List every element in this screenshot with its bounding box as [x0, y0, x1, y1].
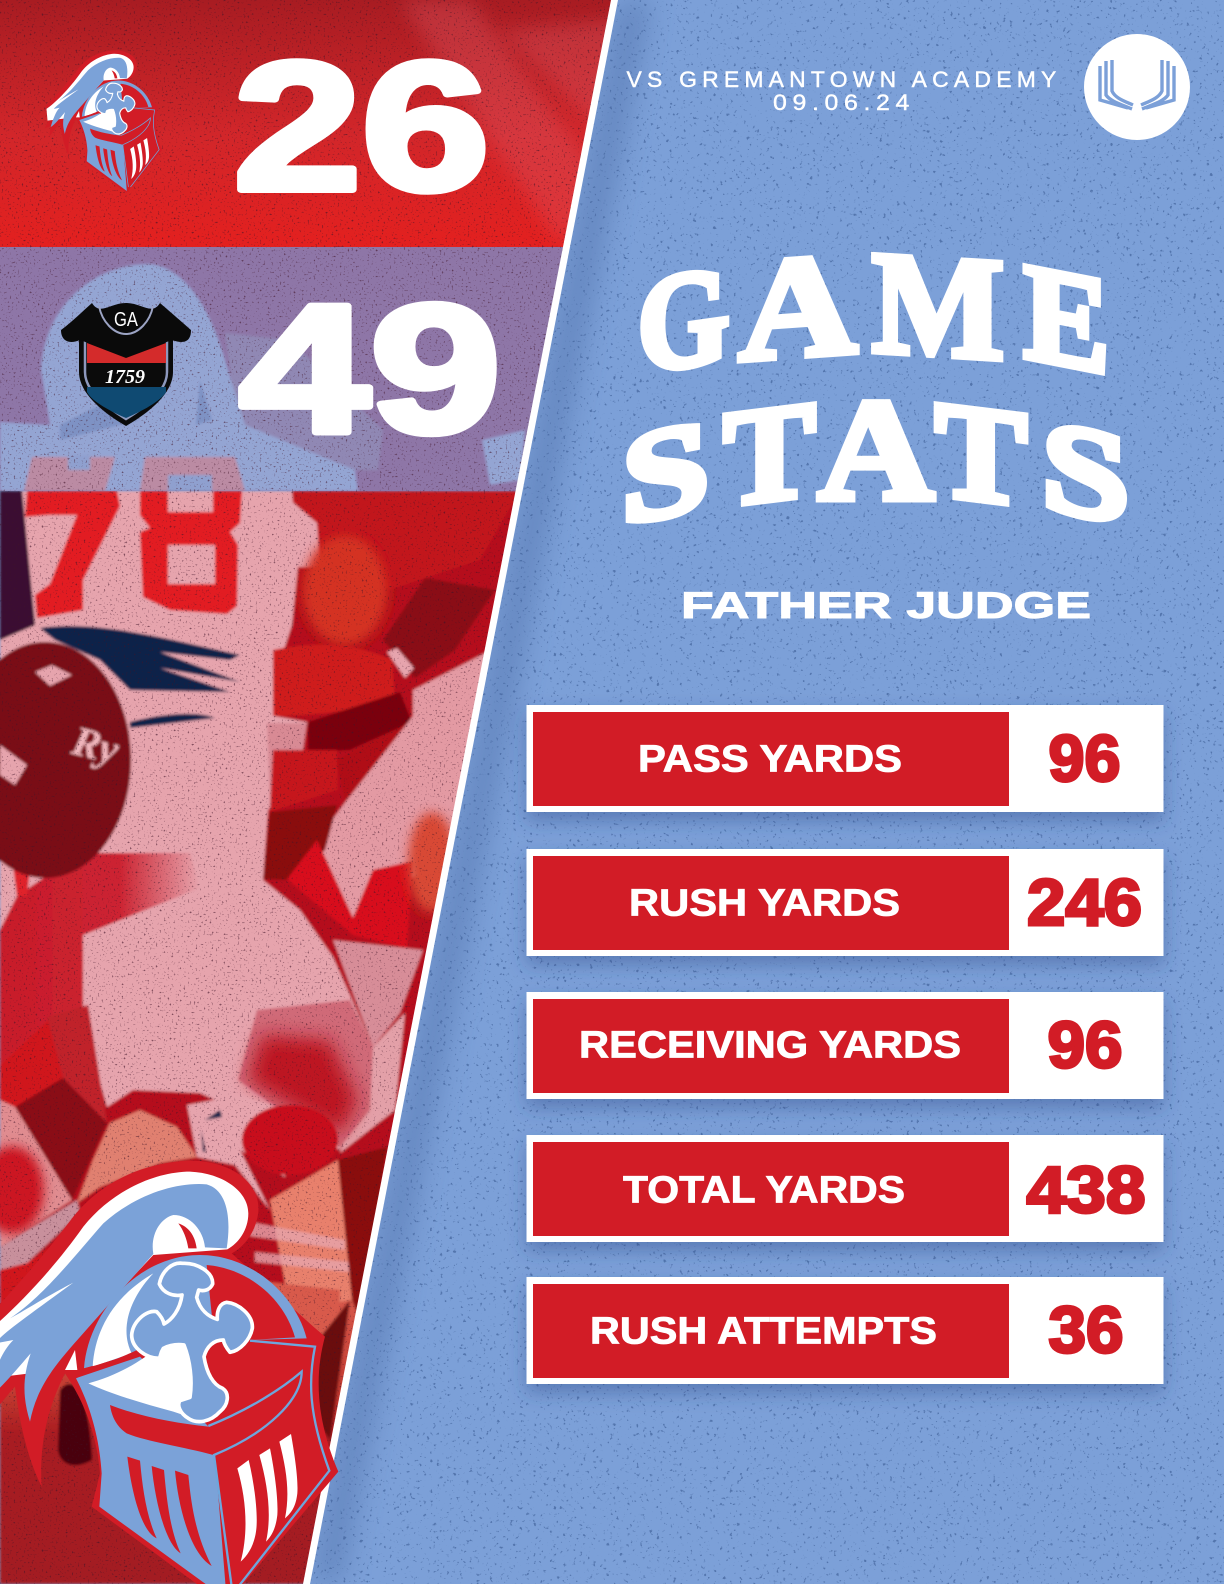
decorative streak — [406, 0, 607, 240]
stat row: pass yards: 96 — [1048, 721, 1120, 795]
stat row: rush yards — [526, 849, 1164, 956]
icon: Germantown Academy shield logo — [61, 303, 191, 426]
grain texture — [0, 0, 620, 1584]
title line: GAME — [638, 221, 1110, 404]
divider: white diagonal line — [303, 0, 618, 1584]
text: opponent and date: 09.06.24 — [773, 90, 915, 115]
icon: Father Judge knight logo large — [0, 1161, 338, 1584]
stat row: rush attempts: RUSH ATTEMPTS — [590, 1310, 937, 1352]
score: Germantown Academy: 49 — [239, 266, 501, 471]
score band: Germantown Academy — [0, 247, 620, 491]
stat row: rush yards: 246 — [1027, 865, 1142, 939]
title: GAME STATS — [622, 221, 1130, 553]
text: opponent and date: VS GREMANTOWN ACADEMY — [626, 67, 1062, 92]
stat row: total yards: TOTAL YARDS — [623, 1170, 905, 1212]
stat row: pass yards: PASS YARDS — [638, 738, 902, 780]
stat row: rush yards: RUSH YARDS — [629, 882, 900, 924]
title line: GAME: M — [872, 221, 1004, 391]
score: Father Judge: 26 — [234, 24, 490, 228]
score band: Father Judge — [0, 0, 620, 247]
stat row: receiving yards: 96 — [1048, 1008, 1122, 1082]
title line: STATS: S — [622, 393, 710, 553]
panel: left photo area — [0, 0, 620, 1584]
title line: STATS: S — [1042, 393, 1130, 553]
GA monogram: GA — [114, 309, 139, 331]
shield year: 1759 — [105, 366, 145, 388]
title line: GAME: A — [739, 222, 857, 392]
stat row: total yards: 438 — [1026, 1152, 1146, 1226]
stat row: pass yards — [526, 705, 1164, 812]
title line: GAME: E — [1024, 235, 1110, 404]
stat row: rush attempts — [526, 1277, 1164, 1384]
photo: football players — [0, 491, 516, 1584]
title line: STATS — [622, 369, 1130, 553]
icon: Father Judge knight logo small — [45, 50, 162, 193]
title line: STATS: T — [935, 372, 1027, 536]
text: opponent and date — [626, 67, 1062, 115]
title line: GAME: G — [638, 236, 730, 402]
subtitle: FATHER JUDGE: FATHER JUDGE — [681, 585, 1091, 626]
icon: open book badge — [1084, 34, 1190, 140]
stat row: receiving yards: RECEIVING YARDS — [579, 1024, 961, 1066]
helmet script: Ry — [67, 718, 124, 774]
title line: STATS: T — [724, 372, 816, 536]
title line: STATS: A — [818, 369, 934, 531]
stat row: rush attempts: 36 — [1048, 1292, 1124, 1366]
stat row: receiving yards — [526, 992, 1164, 1099]
stat row: total yards — [526, 1135, 1164, 1242]
